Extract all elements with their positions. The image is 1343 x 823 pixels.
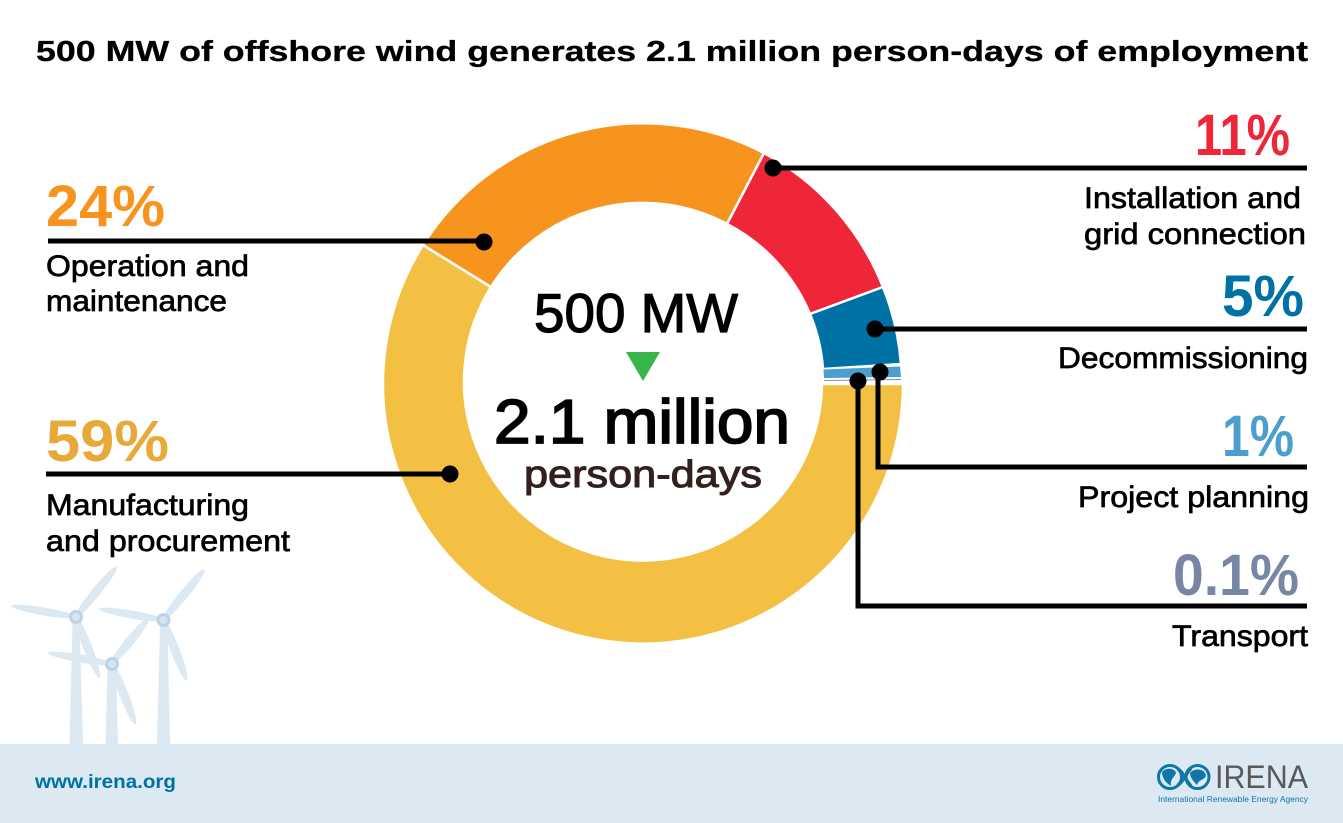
icon: infinity globes (1158, 766, 1209, 788)
callout: manufacturing and procurement: 59% (46, 409, 169, 474)
500 MW: 500 MW (534, 282, 738, 344)
icon: wind turbines (11, 564, 208, 744)
tagline: International Renewable Energy Agency (1158, 794, 1309, 804)
callout: installation and grid connection: grid connection (1084, 218, 1306, 251)
callout: manufacturing and procurement: and procurement (46, 525, 291, 558)
IRENA wordmark: IRENA (1215, 759, 1309, 795)
icon: green down triangle (626, 352, 660, 381)
callout: operation and maintenance: 24% (46, 174, 165, 239)
callout: operation and maintenance: Operation and (46, 250, 249, 283)
title: 500 MW of offshore wind generates 2.1 million person-days of employment (36, 36, 1309, 68)
callout: installation and grid connection: Installation and (1084, 182, 1301, 215)
person-days: person-days (524, 454, 762, 496)
IRENA logo (1158, 759, 1309, 804)
callout: decommissioning: Decommissioning (1058, 342, 1308, 375)
2.1 million: 2.1 million (494, 388, 790, 457)
callout: project planning: Project planning (1078, 481, 1309, 514)
segment: manufacturing and procurement 59% (383, 245, 903, 644)
callout: operation and maintenance: maintenance (46, 285, 227, 318)
callout: project planning (872, 364, 1309, 514)
callout: installation and grid connection (764, 103, 1307, 251)
callout: transport (850, 372, 1309, 653)
callout: manufacturing and procurement: Manufacturing (46, 489, 249, 522)
segment: project planning 1% (824, 366, 901, 378)
callout: operation and maintenance (46, 174, 492, 318)
segment: installation and grid connection 11% (727, 153, 883, 314)
center text (494, 282, 790, 496)
segment: transport 0.1% (824, 380, 901, 381)
website url: www.irena.org (34, 772, 176, 793)
segment: operation and maintenance 24% (423, 123, 764, 287)
callout: transport: Transport (1172, 620, 1309, 653)
callout: decommissioning: 5% (1222, 264, 1304, 329)
callout: project planning: 1% (1222, 404, 1294, 469)
callout: manufacturing and procurement (46, 409, 458, 558)
segment: decommissioning 5% (810, 287, 901, 369)
callout: decommissioning (866, 264, 1308, 375)
callout: installation and grid connection: 11% (1195, 103, 1290, 168)
footer band (0, 744, 1343, 823)
donut chart (383, 123, 903, 644)
callout: transport: 0.1% (1173, 543, 1299, 608)
